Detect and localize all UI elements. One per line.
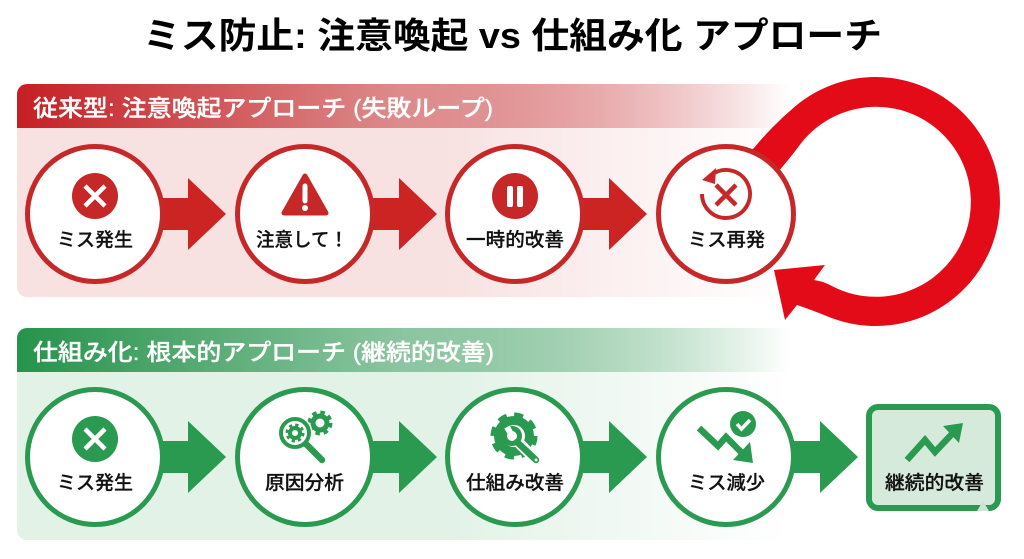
icon: magnifier with gears	[278, 412, 330, 460]
arrow 3 red	[575, 178, 647, 250]
panel: conventional approach	[17, 77, 1000, 326]
arrow 4 green	[785, 421, 858, 493]
icon: recurring x	[702, 168, 750, 218]
label: 仕組み改善: 仕組み改善	[466, 472, 564, 494]
heading: conventional: 従来型: 注意喚起アプローチ (失敗ループ)	[33, 95, 493, 121]
icon: gear with wrench	[493, 415, 538, 462]
step: 一時的改善	[448, 146, 582, 282]
heading: systematic: 仕組み化: 根本的アプローチ (継続的改善)	[33, 339, 494, 365]
arrow 2 green	[365, 421, 437, 493]
step: 原因分析	[238, 390, 372, 524]
label: 継続的改善: 継続的改善	[885, 472, 984, 494]
label: 原因分析: 原因分析	[265, 472, 344, 494]
label: ミス発生: ミス発生	[57, 229, 133, 251]
loop arrow	[748, 77, 1000, 326]
icon: x circle	[72, 416, 118, 462]
icon: warning triangle	[284, 176, 326, 213]
step: ミス減少	[658, 390, 794, 524]
icon: pause	[492, 173, 538, 219]
result box: 継続的改善	[869, 407, 998, 511]
icon: downward trend with check	[699, 411, 756, 463]
step: 仕組み改善	[448, 390, 582, 524]
label: 注意して: 注意して！	[256, 229, 348, 251]
title: ミス防止: 注意喚起 vs 仕組み化 アプローチ	[143, 15, 882, 56]
panel background: conventional	[17, 128, 790, 297]
label: ミス発生: ミス発生	[57, 472, 133, 494]
arrow 2 red	[365, 178, 437, 250]
step: ミス発生	[28, 146, 162, 282]
arrow 3 green	[575, 421, 647, 493]
corner mark	[977, 501, 989, 511]
step: ミス発生	[28, 390, 162, 524]
step: ミス再発	[658, 146, 794, 282]
header bar: systematic	[17, 328, 790, 372]
label: ミス減少: ミス減少	[688, 472, 765, 494]
label: 一時的改善: 一時的改善	[466, 229, 564, 251]
panel background: systematic	[17, 372, 790, 540]
arrow 1 red	[155, 178, 226, 250]
icon: upward trend	[907, 423, 963, 460]
icon: x circle	[72, 173, 118, 219]
panel: systematic approach	[17, 328, 858, 540]
label: ミス再発: ミス再発	[688, 229, 765, 251]
step: 注意して	[238, 146, 372, 282]
arrow 1 green	[155, 421, 226, 493]
header bar: conventional	[17, 84, 790, 128]
